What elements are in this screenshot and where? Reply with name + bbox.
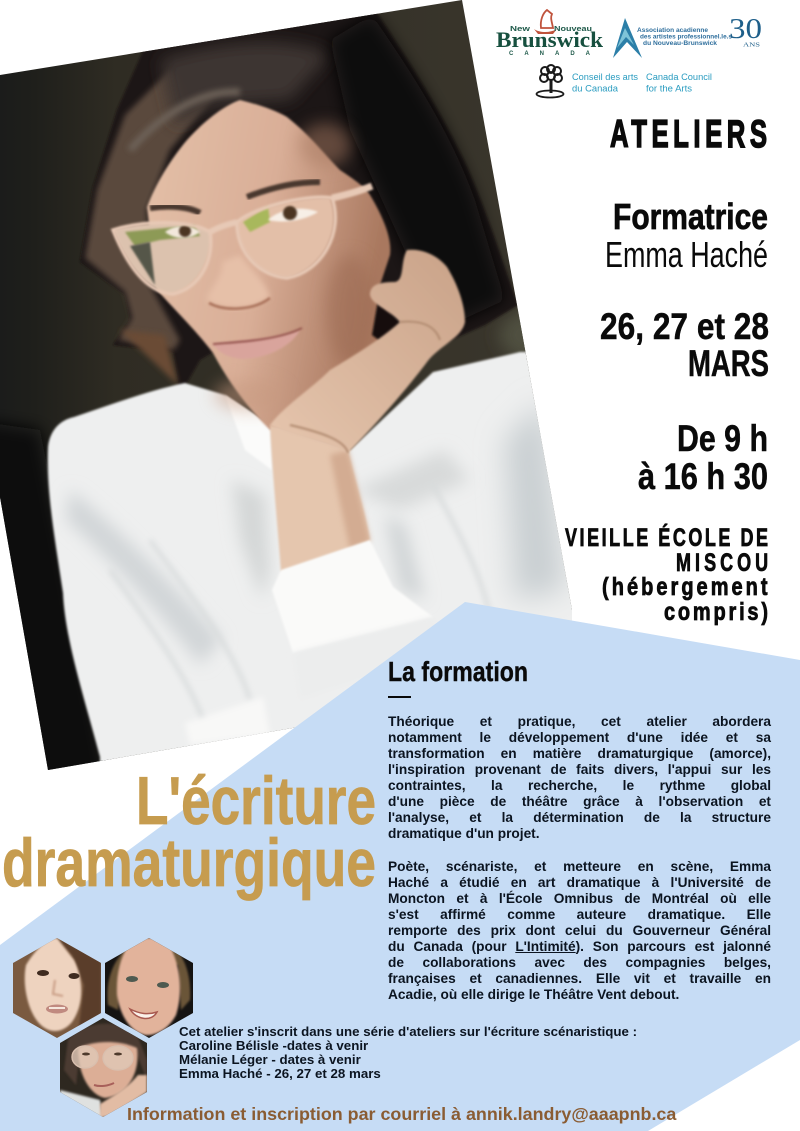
paragraph: formation description <box>388 714 772 841</box>
paragraph: biography <box>388 859 772 1002</box>
cuff <box>272 540 433 653</box>
logo: Association acadienne: du Nouveau-Brunswick <box>643 40 717 47</box>
paragraph: formation description: transformation en matière dramaturgique (amorce), <box>388 746 771 761</box>
dates block <box>600 306 769 384</box>
top hair highlight <box>160 42 330 125</box>
dates block: MARS <box>688 343 769 384</box>
hours block: à 16 h 30 <box>638 456 768 497</box>
face <box>147 100 392 430</box>
logo: Canada Council for the Arts: Conseil des arts <box>572 72 639 82</box>
text: contact information: Information et inscription par courriel à annik.landry@aaapnb.ca <box>127 1104 676 1124</box>
paragraph: formation description: notamment le développement d'une idée et sa <box>388 730 771 745</box>
glasses frames <box>113 186 372 294</box>
paragraph: formation description: Théorique et pratique, cet atelier abordera <box>388 714 771 729</box>
heading: ATELIERS: ATELIERS <box>610 113 767 156</box>
logo: New Brunswick: Brunswick <box>496 27 604 52</box>
location block: VIEILLE ÉCOLE DE <box>565 523 768 552</box>
main title <box>2 763 376 901</box>
paragraph: biography: Haché a étudié en art dramatique à l'Université de <box>388 875 771 890</box>
paragraph: formation description: l'inspiration provenant de faits divers, l'appui sur les <box>388 762 771 777</box>
eyes <box>165 226 200 238</box>
logo: New Brunswick: Nouveau <box>554 24 592 33</box>
hexagon photo: Caroline Bélisle <box>13 938 101 1038</box>
paragraph: formation description: dramatique d'un projet. <box>388 826 540 841</box>
paragraph: biography: remporte des prix dont celui du Gouverneur Général <box>388 923 771 938</box>
hours block: De 9 h <box>677 418 768 459</box>
heading: La formation: La formation <box>388 656 528 687</box>
paragraph: biography: Moncton et à l'École Omnibus de Montréal où elle <box>388 891 771 906</box>
neck white <box>225 395 272 470</box>
hair grey streak <box>130 92 240 150</box>
mouth <box>216 331 299 358</box>
blouse shading <box>66 490 222 665</box>
text: workshop series: Caroline Bélisle -dates à venir <box>179 1038 368 1053</box>
location block <box>565 523 768 626</box>
logo: New Brunswick <box>496 10 604 57</box>
blouse <box>48 352 585 790</box>
paragraph: biography: Acadie, où elle dirige le Théâtre Vent debout. <box>388 987 679 1002</box>
logo: Canada Council for the Arts: du Canada <box>572 84 618 94</box>
hand <box>270 250 465 453</box>
nose <box>210 257 270 306</box>
hexagon photo: Emma Haché <box>60 1018 147 1117</box>
paragraph: biography: s'est affirmé comme auteure dramatique. Elle <box>388 907 771 922</box>
blue diagonal panel <box>0 602 800 1131</box>
paragraph: biography: françaises et canadiennes. Elle vit et travaille en <box>388 971 771 986</box>
gap between fingers and neck <box>370 303 397 340</box>
paragraph: biography: Poète, scénariste, et metteure en scène, Emma <box>388 859 771 874</box>
logo: Association acadienne <box>613 13 762 58</box>
photo background <box>0 0 580 780</box>
logo: Canada Council for the Arts: for the Arts <box>646 84 693 94</box>
brows <box>150 207 200 213</box>
paragraph: biography: de collaborations avec des compagnies belges, <box>388 955 771 970</box>
photo: portrait of Emma Haché <box>0 0 585 790</box>
arm <box>270 425 370 572</box>
hair silhouette <box>80 5 518 395</box>
logo: Association acadienne: 30 <box>729 13 762 45</box>
logo: Association acadienne: des artistes professionnel.le.s <box>640 34 732 40</box>
paragraph: formation description: d'une pièce de théâtre grâce à l'observation et <box>388 794 771 809</box>
hours block <box>638 418 768 497</box>
right hair shadow <box>330 15 505 330</box>
trainer block: Formatrice <box>613 196 768 237</box>
text: workshop series: Mélanie Léger - dates à venir <box>179 1052 361 1067</box>
location block: compris) <box>664 598 768 626</box>
lower left cuff <box>189 702 270 746</box>
left hair highlights <box>85 70 215 350</box>
paragraph: formation description: l'analyse, et la détermination de la structure <box>388 810 771 825</box>
logo: Association acadienne: ANS <box>743 42 760 48</box>
location block: (hébergement <box>602 573 768 601</box>
text: workshop series: Emma Haché - 26, 27 et 28 mars <box>179 1066 381 1081</box>
logo: New Brunswick: New <box>510 24 530 33</box>
hexagon photo: Mélanie Léger <box>105 938 193 1038</box>
main title: L'écriture <box>136 763 376 839</box>
lenses <box>113 224 210 293</box>
logo: Canada Council for the Arts <box>536 65 712 98</box>
paragraph: formation description: contraintes, la recherche, le rythme global <box>388 778 771 793</box>
logo: Canada Council for the Arts: Canada Council <box>646 72 712 82</box>
logo: New Brunswick: CANADA <box>509 51 591 57</box>
dates block: 26, 27 et 28 <box>600 306 769 347</box>
main title: dramaturgique <box>2 825 376 901</box>
trainer block <box>605 196 768 275</box>
logo: Association acadienne: Association acadienne <box>637 27 708 34</box>
text: workshop series <box>179 1025 637 1081</box>
location block: MISCOU <box>676 548 768 577</box>
paragraph: biography: du Canada (pour L'Intimité). Son parcours est jalonné <box>388 939 771 954</box>
